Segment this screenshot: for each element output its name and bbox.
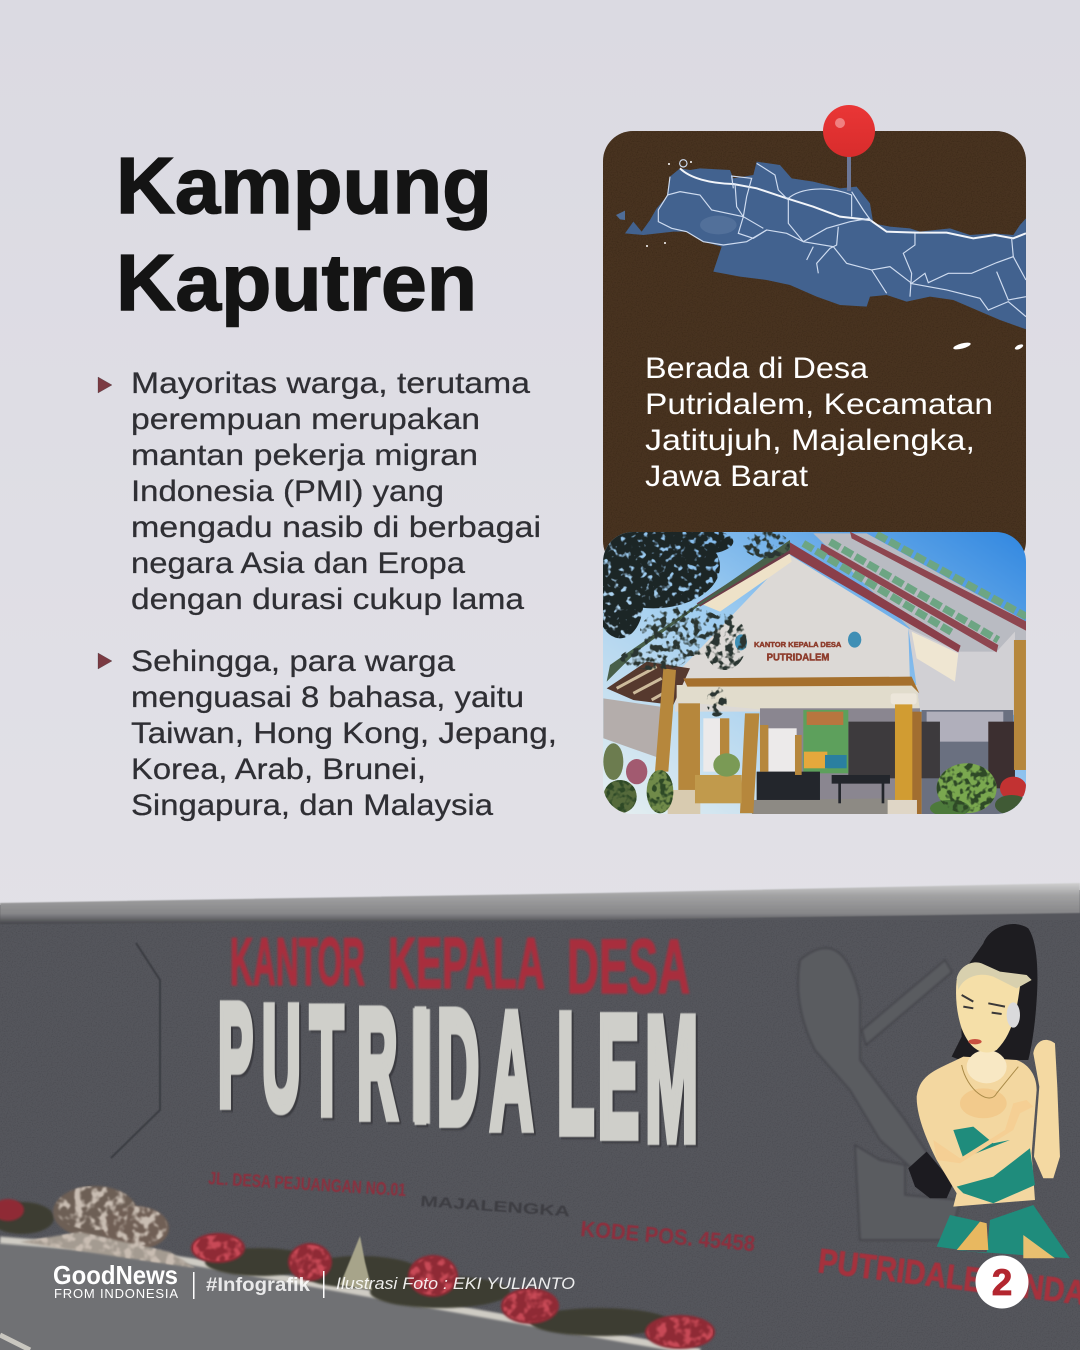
map of West Java [616, 160, 1026, 351]
metal rail [0, 883, 1080, 924]
wall texture [0, 920, 1080, 1350]
lower planter edge [0, 1335, 30, 1350]
planter ledge [0, 1240, 700, 1350]
flower [1007, 1002, 1020, 1028]
PUTRIDALEM sign shadow: T [312, 979, 345, 1148]
red flowers [0, 1199, 715, 1349]
PUTRIDALEM sign letters: U [262, 975, 301, 1141]
title: Kampung [116, 141, 492, 230]
concrete planter [0, 1243, 700, 1350]
secondary roads [658, 160, 1026, 317]
sign name: PUTRIDALEM [767, 653, 829, 664]
forearm across [933, 1100, 1033, 1163]
red sign text [230, 936, 690, 996]
PUTRIDALEM sign letters: T [310, 977, 343, 1146]
skirt gold right [1023, 1235, 1055, 1258]
divider two [323, 1271, 324, 1298]
card background [603, 131, 1026, 571]
bullet 2: Singapura, dan Malaysia [131, 789, 493, 822]
PUTRIDALEM sign letters: A [490, 979, 533, 1164]
divider one [193, 1272, 194, 1299]
shrubs [603, 743, 1028, 817]
PUTRIDALEM sign letters: D [437, 977, 479, 1158]
ping pong tables [757, 772, 890, 803]
emblems [735, 634, 747, 650]
PUTRIDALEM sign shadow: D [439, 979, 481, 1160]
left fascia [697, 543, 790, 607]
bullet 1: Mayoritas warga, terutama [131, 367, 530, 400]
teal skirt [937, 1205, 1070, 1258]
side wing interior [922, 710, 1015, 815]
PUTRIDALEM sign shadow: I [415, 981, 430, 1157]
column base left [668, 790, 700, 815]
location text: Jawa Barat [645, 460, 809, 493]
PUTRIDALEM sign shadow: U [264, 977, 303, 1143]
side wall light [927, 712, 1003, 742]
lips [968, 1039, 982, 1044]
photo credit: Ilustrasi Foto : EKI YULIANTO [336, 1274, 575, 1293]
porch ceiling [677, 685, 920, 712]
bottom photo: village office sign [0, 883, 1080, 1350]
column base [888, 800, 917, 815]
GoodNews logo: FROM INDONESIA [54, 1286, 178, 1301]
bullet 1: mengadu nasib di berbagai [131, 511, 541, 544]
page number badge: 2 [992, 1262, 1012, 1303]
PUTRIDALEM sign shadow: E [600, 981, 641, 1175]
green tiles [803, 534, 1027, 640]
PUTRIDALEM sign letters: E [598, 979, 639, 1173]
arm right [1033, 1040, 1060, 1178]
location text: Jatitujuh, Majalengka, [645, 424, 975, 457]
photo: village office building [587, 525, 1030, 817]
bullet 2 [98, 645, 557, 822]
gap left [703, 718, 722, 772]
doors [988, 722, 1015, 788]
column capital [891, 693, 917, 704]
PUTRIDALEM sign shadow: R [359, 979, 399, 1152]
face [956, 971, 1020, 1052]
islands [646, 161, 1024, 351]
interior windows [848, 722, 940, 778]
small address text: JL. DESA PEJUANGAN NO.01 [208, 1168, 407, 1200]
teal sash [957, 1148, 1035, 1203]
bullet 2: Taiwan, Hong Kong, Jepang, [131, 717, 557, 750]
side wing wall [908, 628, 1015, 715]
location text: Putridalem, Kecamatan [645, 388, 993, 421]
notice board [803, 710, 848, 773]
location text: Berada di Desa [645, 352, 868, 385]
wall [0, 890, 1080, 1350]
tree foliage [587, 525, 790, 717]
bullet 1: perempuan merupakan [131, 403, 480, 436]
bullet 2: menguasai 8 bahasa, yaitu [131, 681, 524, 714]
GoodNews logo: GoodNews [53, 1260, 178, 1290]
left roof [607, 540, 790, 682]
far fascia [850, 532, 1027, 631]
PUTRIDALEM sign letters: R [357, 977, 397, 1150]
skirt gold [957, 1222, 988, 1250]
bullet 2: Korea, Arab, Brunei, [131, 753, 426, 786]
PUTRIDALEM sign shadow: L [559, 981, 596, 1171]
panel: location card [603, 105, 1026, 571]
PUTRIDALEM sign shadow: A [492, 981, 535, 1166]
small address text [208, 1168, 756, 1256]
location text [645, 352, 993, 493]
porch slats [617, 667, 663, 700]
thick stem of letter I [413, 1008, 430, 1124]
porch beam [683, 677, 919, 693]
bullet 1 [98, 367, 541, 616]
stones [20, 1186, 195, 1268]
chest shade [960, 1088, 1007, 1118]
bullet 1: Indonesia (PMI) yang [131, 475, 444, 508]
title [116, 141, 492, 327]
rear roof slope [813, 533, 1027, 712]
page number badge [976, 1256, 1028, 1308]
brows and eyes [962, 995, 1005, 1014]
yellow column [895, 703, 912, 802]
dark greenery behind flowers [0, 1202, 670, 1336]
shield relief outline [111, 943, 160, 1158]
main gable wall [675, 555, 917, 712]
neck highlight [967, 1050, 1007, 1083]
GoodNews logo [53, 1260, 178, 1301]
hashtag: #Infografik [206, 1275, 310, 1296]
bullet list text [98, 367, 557, 822]
crown [957, 962, 1032, 990]
PUTRIDALEM sign shadow: M [647, 984, 700, 1181]
sign letters: KANTOR KEPALA DESA [754, 640, 842, 649]
bullet 1: mantan pekerja migran [131, 439, 478, 472]
teal top [953, 1127, 1010, 1158]
necklace [962, 1065, 1018, 1098]
middle fascia [820, 543, 998, 652]
PUTRIDALEM sign letters: L [557, 979, 594, 1169]
red sign text: KEPALA [388, 924, 545, 1004]
title: Kaputren [116, 238, 477, 327]
hair [952, 924, 1037, 1060]
hair tail [908, 1152, 953, 1198]
bullet 1: negara Asia dan Eropa [131, 547, 465, 580]
main fascia [788, 542, 961, 652]
floor [752, 798, 893, 817]
gable underside [700, 553, 792, 612]
interior [760, 708, 920, 812]
main highway [680, 168, 1026, 238]
painted woman relief [908, 924, 1070, 1258]
PUTRIDALEM sign shadow: P [220, 977, 255, 1139]
torso and arms [917, 1057, 1037, 1207]
bullet 2: Sehingga, para warga [131, 645, 455, 678]
white gap [768, 728, 797, 772]
small address text: MAJALENGKA [420, 1193, 571, 1220]
side porch roof [607, 662, 690, 705]
bullet 1: dengan durasi cukup lama [131, 583, 524, 616]
PUTRIDALEM sign letters: M [645, 982, 698, 1179]
small island [616, 211, 625, 220]
PUTRIDALEM sign letters: P [218, 975, 253, 1137]
low wall [695, 775, 742, 803]
PUTRIDALEM sign letters: I [413, 979, 428, 1155]
map pin [823, 105, 875, 191]
card grain [603, 131, 1026, 571]
right gable underside [912, 632, 958, 682]
sky [600, 530, 1030, 817]
red sign text: KANTOR [230, 924, 365, 1000]
background buildings [603, 698, 660, 758]
footer [53, 1260, 575, 1301]
columns [655, 640, 1026, 815]
relief of grain stalk [798, 948, 960, 1240]
land [625, 162, 1026, 329]
highlands [700, 216, 737, 234]
small address text: KODE POS. 45458 [580, 1216, 756, 1256]
red sign text: DESA [567, 924, 690, 1010]
